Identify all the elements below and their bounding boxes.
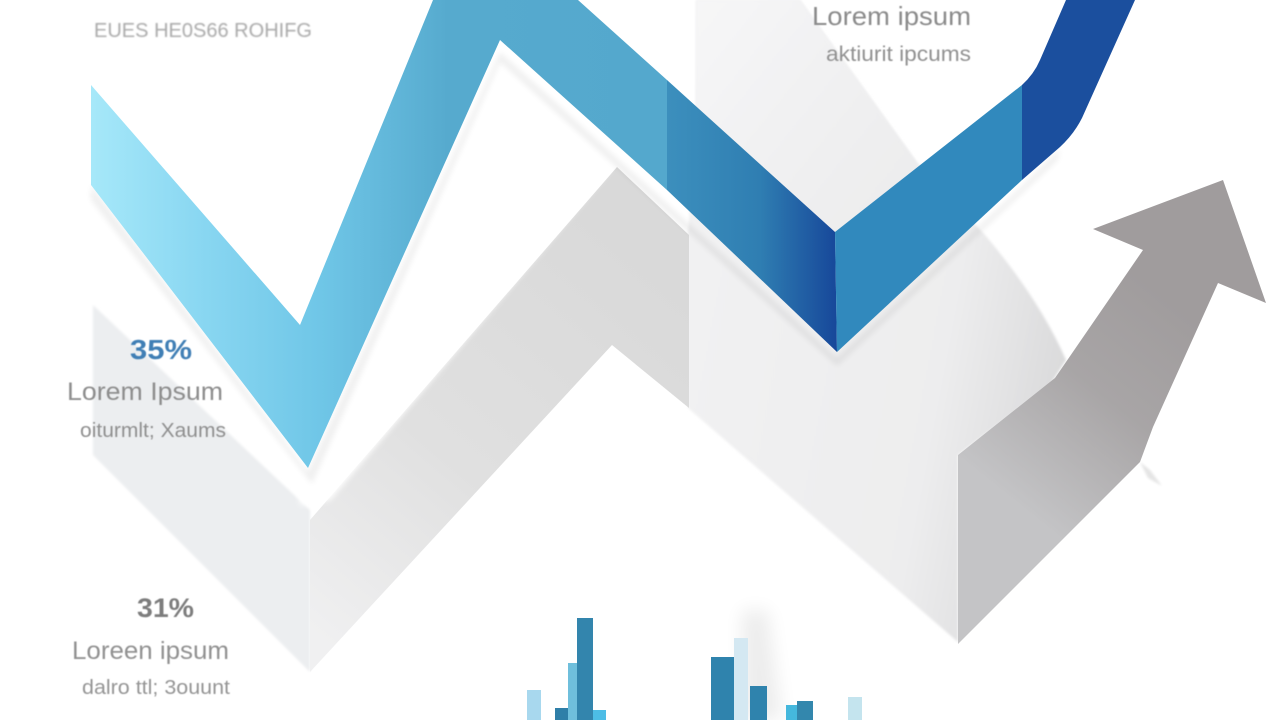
label: top right: aktiurit ipcums — [826, 43, 971, 66]
label: top right: Lorem ipsum — [812, 1, 971, 31]
stat: 31%: dalro ttl; 3ouunt — [82, 677, 230, 699]
grey zigzag ribbon — [93, 0, 1066, 672]
bar shadow — [742, 610, 782, 720]
ribbon segments 1 and 2: cyan to sky blue — [91, 0, 667, 468]
ribbon segment 4: mid blue — [835, 85, 1022, 352]
ribbon segment 5: dark blue — [1022, 0, 1135, 180]
arrow body — [958, 180, 1266, 644]
stat: 35%: Lorem Ipsum — [67, 378, 223, 406]
stat: 35% — [67, 334, 226, 442]
grey back panel top — [696, 0, 950, 240]
blue rising ribbon — [91, 0, 1135, 468]
arrow soft shadow — [1140, 462, 1162, 486]
stat: 35%: 35% — [130, 334, 192, 365]
soft highlight along grey edge — [300, 130, 610, 505]
title: EUES HE0S66 ROHIFG — [94, 20, 312, 42]
stat: 31% — [72, 593, 230, 699]
label: top right — [812, 1, 971, 66]
ribbon segment 3: gradient to deep blue — [667, 80, 837, 352]
grey back panel upper right — [688, 0, 1066, 642]
stat: 31%: Loreen ipsum — [72, 637, 229, 665]
stat: 35%: oiturmlt; Xaums — [80, 420, 226, 442]
bar chart — [527, 610, 862, 720]
grey arrow — [958, 180, 1266, 644]
grey middle face — [310, 167, 689, 672]
stat: 31%: 31% — [137, 593, 194, 623]
ribbon shadow — [91, 52, 1060, 484]
grey left face — [93, 305, 310, 672]
